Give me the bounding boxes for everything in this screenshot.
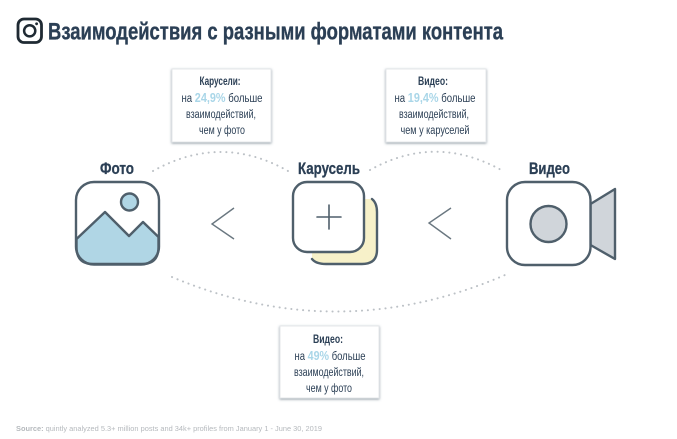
icon: carousel: [293, 182, 377, 264]
callout: video vs photo: взаимодействий,: [294, 367, 364, 379]
callout: video vs carousels: на 19,4% больше: [394, 90, 476, 105]
source note: Source: quintly analyzed 5.3+ million posts and 34k+ profiles from January 1 - June 30, 2019: [16, 424, 322, 433]
callout: video vs carousels: Видео:: [418, 76, 448, 88]
dotted arc: carousel to video: [370, 152, 503, 171]
callout: video vs photo: чем у фото: [306, 383, 352, 395]
callout: video vs photo: [280, 326, 379, 398]
callout: carousels vs photo: Карусели:: [200, 76, 240, 88]
callout: carousels vs photo: [172, 69, 271, 142]
callout: video vs carousels: чем у каруселей: [400, 125, 470, 137]
label: carousel: Карусель: [298, 159, 360, 178]
callout: video vs carousels: взаимодействий,: [399, 109, 469, 121]
dotted arc: photo to carousel: [153, 152, 288, 171]
label: photo: Фото: [100, 159, 134, 178]
icon: video camera: [507, 182, 615, 265]
callout: video vs carousels: [386, 69, 486, 142]
callout: video vs photo: Видео:: [313, 334, 343, 346]
dotted arc: photo to video: [172, 275, 505, 312]
callout: video vs photo: на 49% больше: [294, 348, 366, 363]
callout: carousels vs photo: на 24,9% больше: [182, 90, 262, 105]
less-than sign: photo vs carousel: [212, 208, 234, 239]
callout: carousels vs photo: взаимодействий,: [186, 109, 256, 121]
less-than sign: carousel vs video: [429, 208, 451, 239]
icon: instagram logo: [18, 19, 42, 42]
icon: photo: [76, 182, 159, 264]
callout: carousels vs photo: чем у фото: [199, 125, 245, 137]
label: video: Видео: [529, 159, 570, 178]
title: Взаимодействия с разными форматами контента: [48, 18, 503, 46]
